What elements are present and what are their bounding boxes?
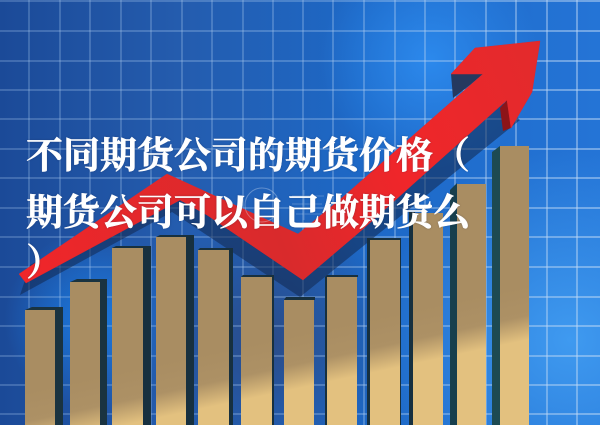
title text: 期货公司可以自己做期货么 <box>26 193 470 234</box>
watermark logo <box>245 188 324 222</box>
arrow fold shadows <box>451 74 511 131</box>
bar 1 <box>25 307 63 425</box>
bar 3 <box>112 246 151 425</box>
bar chart <box>25 146 529 425</box>
red arrow <box>19 41 540 283</box>
bar 12 <box>492 146 529 425</box>
bar 6 <box>241 275 274 425</box>
bar 8 <box>325 275 358 425</box>
arrow body <box>19 41 540 283</box>
bar 10 <box>409 212 443 425</box>
bar 5 <box>198 248 233 425</box>
bar 4 <box>156 235 194 425</box>
title text: 不同期货公司的期货价格（ <box>26 136 470 177</box>
bar 11 <box>450 183 486 425</box>
bar 7 <box>284 297 315 425</box>
bar 9 <box>367 238 401 425</box>
arrow shadow <box>20 100 520 297</box>
bar 2 <box>70 279 107 425</box>
title text: ） <box>26 243 63 284</box>
